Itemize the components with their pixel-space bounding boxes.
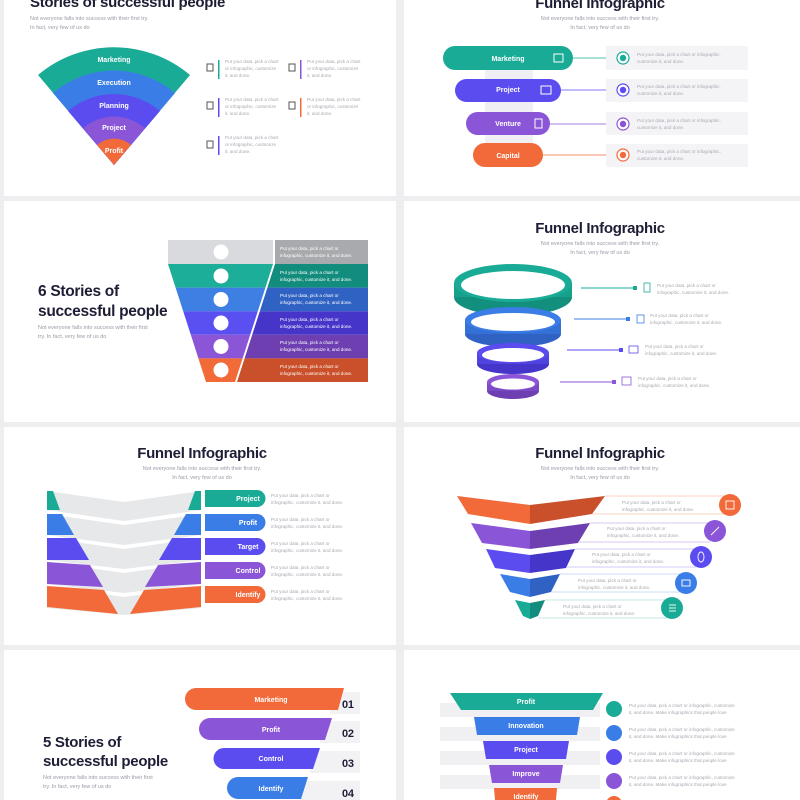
callouts: Put your data, pick a chart or — [563, 604, 622, 609]
chart: fan funnel: Marketing — [97, 57, 131, 64]
texts: Put your data, pick a chart or — [271, 589, 330, 594]
text blocks with icons: or infographic, customize — [225, 66, 277, 71]
subtitle: Not everyone falls into success with their first try. — [541, 16, 660, 22]
connectors and texts: infographic, customize it, and done. — [657, 290, 729, 295]
funnel stack: Innovation — [508, 723, 544, 730]
panel: ring funnel — [404, 201, 800, 422]
funnel table: Put your data, pick a chart or — [280, 317, 339, 322]
icon circles and texts: it, and done. Make infographics that people love — [629, 710, 727, 715]
texts: Put your data, pick a chart or — [271, 493, 330, 498]
panel: 5 stories bars — [4, 650, 396, 800]
subtitle: Not everyone falls into success with their first try. — [143, 466, 262, 472]
numbered bars: Control — [259, 756, 283, 763]
icon circles and texts: it, and done. Make infographics that people love — [629, 758, 727, 763]
text boxes: Put your data, pick a chart or infographic, — [637, 118, 721, 123]
title: 6 Stories of — [38, 283, 120, 300]
funnel stack: Improve — [512, 771, 540, 778]
subtitle: Not everyone falls into success with their first — [43, 775, 153, 781]
title — [38, 283, 168, 320]
callouts: infographic, customize it, and done. — [578, 585, 650, 590]
subtitle: Not everyone falls into success with their first try. — [541, 241, 660, 247]
panel: trapezoid funnel stack — [404, 650, 800, 800]
subtitle: Not everyone falls into success with their first try. — [30, 16, 149, 22]
text boxes: Put your data, pick a chart or infographic, — [637, 84, 721, 89]
title: successful people — [38, 303, 168, 320]
text boxes: customize it, and done. — [637, 156, 684, 161]
callouts: infographic, customize it, and done. — [622, 507, 694, 512]
funnel table: infographic, customize it, and done. — [280, 253, 352, 258]
icon circles and texts: it, and done. Make infographics that people love — [629, 734, 727, 739]
subtitle — [541, 16, 660, 31]
text boxes: customize it, and done. — [637, 59, 684, 64]
funnel table: Put your data, pick a chart or — [280, 270, 339, 275]
funnel bands — [47, 491, 201, 615]
subtitle: In fact, very few of us do — [570, 250, 630, 256]
label pills: Target — [238, 544, 259, 551]
connectors and texts: Put your data, pick a chart or — [657, 283, 716, 288]
title: Funnel Infographic — [535, 445, 665, 462]
text boxes — [606, 46, 748, 167]
title — [43, 734, 168, 770]
pills: Venture — [495, 121, 521, 128]
subtitle: try. In fact, very few of us do — [38, 334, 106, 340]
texts: infographic, customize it, and done. — [271, 572, 343, 577]
label pills: Control — [236, 568, 260, 575]
numbered bars: Profit — [262, 727, 281, 734]
text boxes: customize it, and done. — [637, 125, 684, 130]
title: successful people — [43, 753, 168, 770]
subtitle — [143, 466, 262, 481]
texts: infographic, customize it, and done. — [271, 548, 343, 553]
texts: infographic, customize it, and done. — [271, 596, 343, 601]
numbered bars: Identify — [259, 786, 284, 793]
subtitle — [38, 325, 148, 340]
numbered bars — [185, 688, 360, 800]
panel: 3D funnel with callouts — [404, 427, 800, 645]
text blocks with icons: Put your data, pick a chart — [225, 135, 279, 140]
chart: fan funnel: Execution — [97, 80, 131, 87]
pills — [443, 46, 623, 167]
subtitle — [541, 466, 660, 481]
text blocks with icons: it, and done. — [225, 73, 250, 78]
subtitle — [30, 16, 149, 31]
text blocks with icons: it, and done. — [225, 149, 250, 154]
connectors and texts: Put your data, pick a chart or — [645, 344, 704, 349]
text boxes: customize it, and done. — [637, 91, 684, 96]
text blocks with icons: Put your data, pick a chart — [225, 59, 279, 64]
callouts: Put your data, pick a chart or — [592, 552, 651, 557]
connectors and texts: infographic, customize it, and done. — [638, 383, 710, 388]
text blocks with icons: Put your data, pick a chart — [307, 59, 361, 64]
title: 5 Stories of — [43, 734, 122, 751]
connectors and texts: Put your data, pick a chart or — [650, 313, 709, 318]
chart: fan funnel: Profit — [105, 148, 124, 155]
callouts: Put your data, pick a chart or — [622, 500, 681, 505]
connectors and texts: infographic, customize it, and done. — [645, 351, 717, 356]
texts: Put your data, pick a chart or — [271, 541, 330, 546]
text blocks with icons: or infographic, customize — [307, 66, 359, 71]
subtitle: Not everyone falls into success with their first try. — [541, 466, 660, 472]
text boxes: Put your data, pick a chart or infographic, — [637, 149, 721, 154]
funnel table: infographic, customize it, and done. — [280, 277, 352, 282]
texts — [271, 493, 343, 601]
pills: Marketing — [491, 56, 525, 63]
numbered bars: 03 — [342, 758, 354, 770]
text blocks with icons: Put your data, pick a chart — [225, 97, 279, 102]
text blocks with icons: or infographic, customize — [307, 104, 359, 109]
label pills: Profit — [239, 520, 258, 527]
subtitle: In fact, very few of us do — [30, 25, 90, 31]
chart: fan funnel: Project — [102, 125, 127, 132]
funnel table: Put your data, pick a chart or — [280, 246, 339, 251]
chart: fan funnel — [38, 47, 190, 165]
subtitle: try. In fact, very few of us do — [43, 784, 111, 790]
funnel table: infographic, customize it, and done. — [280, 371, 352, 376]
connectors and texts: Put your data, pick a chart or — [638, 376, 697, 381]
text blocks with icons — [207, 59, 361, 155]
funnel table — [168, 240, 368, 382]
connectors and texts: infographic, customize it, and done. — [650, 320, 722, 325]
subtitle: In fact, very few of us do — [570, 25, 630, 31]
text blocks with icons: it, and done. — [307, 73, 332, 78]
connectors and texts — [560, 283, 729, 388]
text blocks with icons: or infographic, customize — [225, 104, 277, 109]
callouts: infographic, customize it, and done. — [592, 559, 664, 564]
texts: infographic, customize it, and done. — [271, 524, 343, 529]
icon circles and texts: Put your data, pick a chart or infographic, customize — [629, 751, 735, 756]
funnel stack: Project — [514, 747, 539, 754]
subtitle: In fact, very few of us do — [172, 475, 232, 481]
funnel table: Put your data, pick a chart or — [280, 340, 339, 345]
text boxes: Put your data, pick a chart or infographic, — [637, 52, 721, 57]
callouts: infographic, customize it, and done. — [563, 611, 635, 616]
text blocks with icons: or infographic, customize — [225, 142, 277, 147]
icon circles and texts: it, and done. Make infographics that people love — [629, 782, 727, 787]
title: Funnel Infographic — [137, 445, 267, 462]
panel: fan funnel slide — [4, 0, 396, 196]
callouts: Put your data, pick a chart or — [578, 578, 637, 583]
pills: Capital — [496, 153, 520, 160]
label pills — [205, 490, 266, 603]
funnel table: infographic, customize it, and done. — [280, 347, 352, 352]
funnel table: Put your data, pick a chart or — [280, 293, 339, 298]
numbered bars: 01 — [342, 699, 354, 711]
funnel stack: Profit — [517, 699, 536, 706]
funnel table: infographic, customize it, and done. — [280, 300, 352, 305]
callouts — [538, 494, 741, 619]
icon circles and texts: Put your data, pick a chart or infographic, customize — [629, 703, 735, 708]
funnel layers — [457, 496, 605, 619]
icon circles and texts: Put your data, pick a chart or infographic, customize — [629, 727, 735, 732]
texts: Put your data, pick a chart or — [271, 517, 330, 522]
funnel table: infographic, customize it, and done. — [280, 324, 352, 329]
numbered bars: 02 — [342, 728, 354, 740]
title: Funnel Infographic — [535, 220, 665, 237]
panel: 6 stories table funnel — [4, 201, 396, 422]
label pills: Identify — [236, 592, 261, 599]
numbered bars: Marketing — [254, 697, 288, 704]
subtitle — [43, 775, 153, 790]
callouts: Put your data, pick a chart or — [607, 526, 666, 531]
icon circles and texts — [606, 701, 735, 800]
text blocks with icons: it, and done. — [307, 111, 332, 116]
subtitle — [541, 241, 660, 256]
chart: fan funnel: Planning — [99, 103, 129, 110]
numbered bars: 04 — [342, 788, 355, 800]
callouts: infographic, customize it, and done. — [607, 533, 679, 538]
text blocks with icons: it, and done. — [225, 111, 250, 116]
label pills: Project — [236, 496, 261, 503]
panel: pill funnel slide — [404, 0, 800, 196]
funnel stack — [440, 693, 603, 800]
subtitle: In fact, very few of us do — [570, 475, 630, 481]
texts: infographic, customize it, and done. — [271, 500, 343, 505]
subtitle: Not everyone falls into success with their first — [38, 325, 148, 331]
funnel table: Put your data, pick a chart or — [280, 364, 339, 369]
panel: split funnel with labels — [4, 427, 396, 645]
text blocks with icons: Put your data, pick a chart — [307, 97, 361, 102]
texts: Put your data, pick a chart or — [271, 565, 330, 570]
rings — [454, 264, 572, 399]
pills: Project — [496, 87, 521, 94]
icon circles and texts: Put your data, pick a chart or infographic, customize — [629, 775, 735, 780]
